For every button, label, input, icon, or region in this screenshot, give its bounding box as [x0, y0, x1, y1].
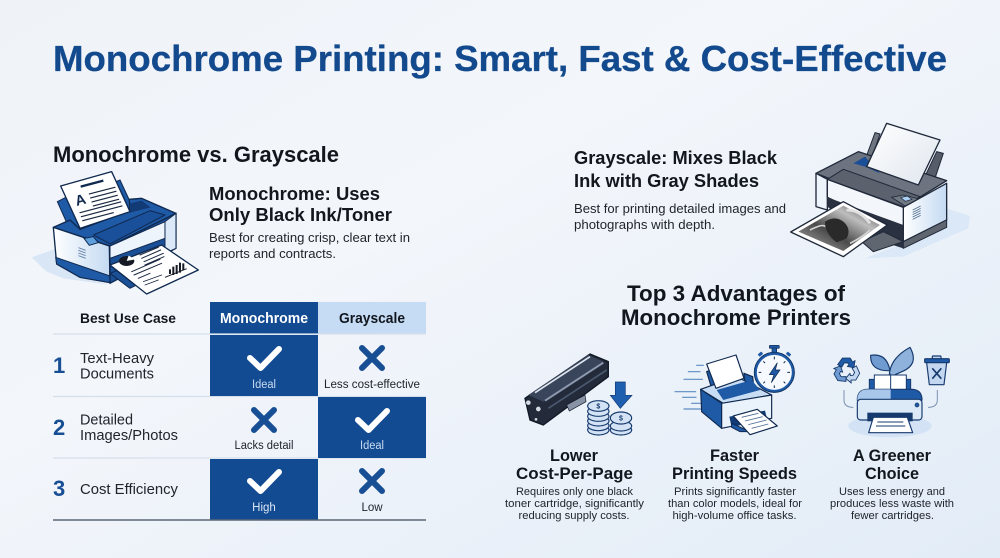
text block: grayscale: photographs with depth. — [574, 218, 715, 232]
text block: a greener choice: Uses less energy and — [839, 486, 945, 498]
text block: faster printing speeds: Faster — [710, 446, 759, 465]
text block: grayscale: Grayscale: Mixes Black — [574, 147, 778, 168]
row 2: detailed images and photos: Detailed — [80, 412, 133, 428]
text block: lower cost-per-page — [505, 446, 645, 522]
icon: fast printer with stopwatch — [675, 345, 794, 435]
text block: lower cost-per-page: reducing supply costs. — [518, 510, 630, 522]
table header — [80, 302, 426, 334]
text block: lower cost-per-page: Cost-Per-Page — [516, 464, 633, 483]
text block: a greener choice: produces less waste with — [830, 498, 954, 510]
row 1: text-heavy documents — [53, 335, 420, 396]
row 1: text-heavy documents: 1 — [53, 353, 65, 378]
leaves — [871, 347, 913, 393]
icon: eco printer with leaves, recycling and bin — [832, 347, 949, 437]
text block: monochrome: Only Black Ink/Toner — [209, 204, 392, 225]
text block: lower cost-per-page: Requires only one black — [516, 486, 633, 498]
stopwatch — [754, 345, 794, 392]
heading: top 3 advantages: Monochrome Printers — [621, 305, 851, 330]
text block: grayscale — [574, 147, 786, 232]
text block: monochrome: Monochrome: Uses — [209, 183, 380, 204]
trash bin — [925, 356, 949, 385]
row 3: cost efficiency: 3 — [53, 476, 65, 501]
row 3: cost efficiency: High — [252, 502, 276, 514]
recycling symbol — [832, 358, 862, 385]
icon: monochrome printer — [32, 172, 198, 294]
icon: toner cartridge and coins: $ — [596, 404, 600, 411]
text block: a greener choice — [830, 446, 954, 522]
row 1: text-heavy documents: Less cost-effective — [324, 379, 420, 391]
text block: monochrome: reports and contracts. — [209, 247, 336, 261]
title: Monochrome Printing: Smart, Fast & Cost-Effective — [53, 38, 947, 79]
icon: toner cartridge and coins: $ — [619, 416, 623, 423]
text block: a greener choice: A Greener — [853, 446, 931, 465]
heading: monochrome vs grayscale: Monochrome vs. Grayscale — [53, 142, 339, 167]
text block: lower cost-per-page: toner cartridge, significantly — [505, 498, 645, 510]
text block: lower cost-per-page: Lower — [550, 446, 598, 465]
text block: a greener choice: fewer cartridges. — [851, 510, 934, 522]
row 3: cost efficiency — [53, 459, 383, 520]
text block: monochrome: Best for creating crisp, clear text in — [209, 231, 410, 245]
icon: toner cartridge and coins — [525, 354, 632, 435]
row 2: detailed images and photos: Images/Photos — [80, 428, 178, 444]
row 2: detailed images and photos: 2 — [53, 415, 65, 440]
text block: grayscale: Ink with Gray Shades — [574, 170, 759, 191]
row 1: text-heavy documents: Documents — [80, 366, 154, 382]
row 3: cost efficiency: Low — [361, 502, 383, 514]
heading: top 3 advantages — [621, 281, 851, 330]
row 1: text-heavy documents: Text-Heavy — [80, 351, 155, 367]
row 3: cost efficiency: Cost Efficiency — [80, 482, 179, 498]
text block: faster printing speeds: Printing Speeds — [672, 464, 797, 483]
text block: faster printing speeds: Prints significantly faster — [674, 486, 796, 498]
row 2: detailed images and photos: Lacks detail — [234, 440, 294, 452]
table header: Monochrome — [220, 311, 308, 327]
icon: grayscale printer — [791, 123, 970, 258]
comparison table — [53, 302, 426, 520]
icon: monochrome printer: A — [74, 192, 88, 210]
table header: Best Use Case — [80, 310, 176, 326]
heading: top 3 advantages: Top 3 Advantages of — [627, 281, 846, 306]
row 2: detailed images and photos — [53, 397, 426, 458]
row 2: detailed images and photos: Ideal — [360, 440, 384, 452]
table header: Grayscale — [339, 311, 405, 327]
text block: faster printing speeds — [668, 446, 802, 522]
text block: grayscale: Best for printing detailed images and — [574, 202, 786, 216]
text block: faster printing speeds: high-volume office tasks. — [672, 510, 796, 522]
row 1: text-heavy documents: Ideal — [252, 379, 276, 391]
text block: a greener choice: Choice — [865, 464, 919, 483]
text block: faster printing speeds: than color models, ideal for — [668, 498, 802, 510]
text block: monochrome — [209, 183, 410, 261]
